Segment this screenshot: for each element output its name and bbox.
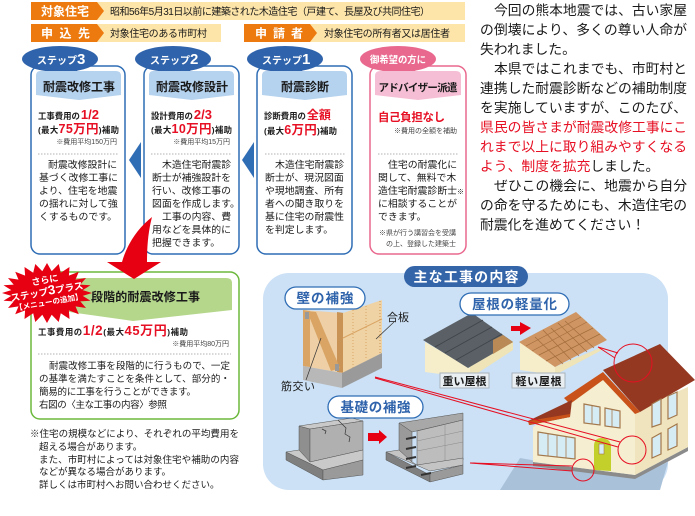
arrow: step 2 to step 3 [129,142,141,178]
panel: advisor dispatch: 御希望の方に [370,54,426,65]
label: foundation reinforcement [328,396,423,418]
panel: step 2: ※費用平均15万円 [173,137,230,146]
panel: step 2: 用などを具体的に [152,223,231,236]
text: footnotes: 詳しくは市町村へお問い合わせください。 [39,479,220,491]
banner: where to apply [31,24,221,42]
label: roof lightening [460,293,569,315]
panel: staged retrofit: 耐震改修工事を段階的に行うもので、一定 [49,360,230,372]
illustration: heavy roof [423,313,513,388]
panel: staged retrofit: ※費用平均80万円 [172,339,229,348]
panel: step 1: や現地調査、所有 [265,184,344,197]
illustration: light roof: 軽い屋根 [516,374,562,388]
panel: step 1: ステップ1 [262,51,310,68]
panel: staged retrofit [31,272,239,419]
panel: advisor dispatch [360,46,466,254]
panel: step 3: より、住宅を地震 [39,184,118,197]
text: footnotes: などが異なる場合があります。 [39,466,171,478]
arrow: roof before to after [511,322,531,335]
panel: step 2: 耐震改修設計 [156,79,228,94]
label: wall reinforcement [285,287,365,309]
panel: advisor dispatch: できます。 [378,211,426,223]
panel: step 2: 工事の内容、費 [162,210,231,223]
panel: step 1: 耐震診断 [281,79,329,94]
text: message: の命を守るためにも、木造住宅の [480,198,687,213]
text: message: の倒壊により、多くの尊い人命が [480,22,687,38]
text: message [480,2,687,232]
panel: step 1: 診断費用の全額 [264,107,331,122]
panel: step 3: 工事費用の1/2 [38,107,99,122]
panel: advisor dispatch: の上、登録した建築士 [386,239,456,248]
label: wall reinforcement: 壁の補強 [296,291,354,306]
burst: step 3 plus badge: 【メニューの追加】 [14,291,83,313]
panel: staged retrofit: 工事費用の1/2(最大45万円)補助 [38,323,188,338]
illustration: damaged foundation [286,418,363,480]
panel: step 2: 設計費用の2/3 [151,107,212,122]
panel: step 3: ステップ3 [37,51,85,68]
panel: staged retrofit: 簡易的に工事を行うことができます。 [39,386,196,398]
panel: step 1: 断士が、現況図面 [265,171,344,184]
text: message: ぜひこの機会に、地震から自分 [494,178,687,194]
banner: applicant: 対象住宅の所有者又は居住者 [324,27,450,40]
panel: step 2: 木造住宅耐震診 [162,158,231,171]
panel: advisor dispatch: アドバイザー派遣 [378,81,458,94]
panel: advisor dispatch: に相談することが [378,197,457,210]
text: message: 連携した耐震診断などの補助制度 [480,81,687,96]
text: footnotes: 超える場合があります。 [39,441,142,453]
panel: staged retrofit: 右図の〈主な工事の内容〉参照 [39,399,167,411]
banner: where to apply: 申 込 先 [41,26,90,40]
banner: applicant [244,24,465,42]
banner: target housing [31,2,465,20]
panel: advisor dispatch: ※費用の全額を補助 [394,126,457,135]
panel: step 3: 耐震改修設計に [48,158,117,171]
banner: where to apply: 対象住宅のある市町村 [110,27,207,40]
text: message: 耐震化を進めてください！ [480,218,645,232]
panel: advisor dispatch: 造住宅耐震診断士※ [378,184,464,197]
panel: step 1: (最大6万円)補助 [264,123,337,137]
panel: step 3: の揺れに対して強 [39,197,118,210]
illustration: reinforced foundation [386,413,463,482]
panel: step 1: 者への聞き取りを [265,198,344,210]
illustration: wall reinforcement [281,300,409,393]
panel: step 3 [22,46,125,254]
panel: step 3: ※費用平均150万円 [56,137,117,146]
panel: advisor dispatch: 自己負担なし [378,110,445,124]
illustration: heavy roof: 重い屋根 [442,374,486,388]
burst: step 3 plus badge: さらに [31,273,59,287]
text: message: を実施していますが、このたび、 [480,100,687,116]
text: message: れまで以上に取り組みやすくなる [480,140,687,154]
panel: step 1: 木造住宅耐震診 [275,158,344,171]
illustration: house [500,344,695,490]
panel: step 2: 図面を作成します。 [152,198,240,210]
illustration: wall reinforcement: 合板 [387,310,409,324]
panel: step 1: 基に住宅の耐震性 [265,210,344,223]
arrow: step 1 to step 2 [242,142,254,178]
panel: step 2: 行い、改修工事の [152,184,231,197]
panel: step 1 [247,46,352,254]
panel: main construction work: 主な工事の内容 [414,269,518,285]
text: message: 今回の熊本地震では、古い家屋 [494,2,687,18]
arrow: red curved arrow [107,217,161,279]
panel: step 2 [135,46,240,254]
text: message: 本県ではこれまでも、市町村と [494,62,687,76]
banner: target housing: 対象住宅 [41,4,89,18]
arrow: foundation before to after [368,430,387,444]
banner: applicant: 申 請 者 [255,26,303,40]
panel: step 2: 把握できます。 [152,236,220,249]
label: foundation reinforcement: 基礎の補強 [340,399,411,415]
illustration: light roof [512,312,607,388]
panel: main construction work [263,266,668,490]
burst: step 3 plus badge [2,263,92,323]
text: message: よう、制度を拡充しました。 [480,159,659,174]
panel: step 2: 断士が補強設計を [152,171,231,184]
panel: step 1: を判定します。 [265,223,333,236]
panel: step 3: くするものです。 [39,211,117,223]
label: roof lightening: 屋根の軽量化 [472,296,558,312]
panel: step 3: 耐震改修工事 [43,79,115,94]
burst: step 3 plus badge: ステップ3プラス [9,277,84,304]
panel: staged retrofit: 段階的耐震改修工事 [91,289,200,304]
illustration: wall reinforcement: 筋交い [281,379,315,393]
panel: step 2: (最大10万円)補助 [151,122,232,136]
text: footnotes: ※住宅の規模などにより、それぞれの平均費用を [30,428,239,440]
panel: advisor dispatch: ※県が行う講習会を受講 [379,228,456,237]
panel: step 3: 基づく改修工事に [39,171,118,184]
text: footnotes: また、市町村によっては対象住宅や補助の内容 [39,454,239,466]
text: message: 失われました。 [480,42,576,57]
panel: advisor dispatch: 関して、無料で木 [378,171,456,184]
text: footnotes [30,428,239,491]
callout: red leader lines and circles [375,344,652,481]
panel: step 3: (最大75万円)補助 [38,122,119,136]
text: message: 県民の皆さまが耐震改修工事にこ [480,120,687,135]
banner: target housing: 昭和56年5月31日以前に建築された木造住宅（戸建て、長屋及び共同住宅） [110,5,430,18]
panel: staged retrofit: の基準を満たすことを条件として、部分的・ [39,373,230,385]
panel: advisor dispatch: 住宅の耐震化に [388,158,457,171]
panel: step 2: ステップ2 [150,51,198,68]
